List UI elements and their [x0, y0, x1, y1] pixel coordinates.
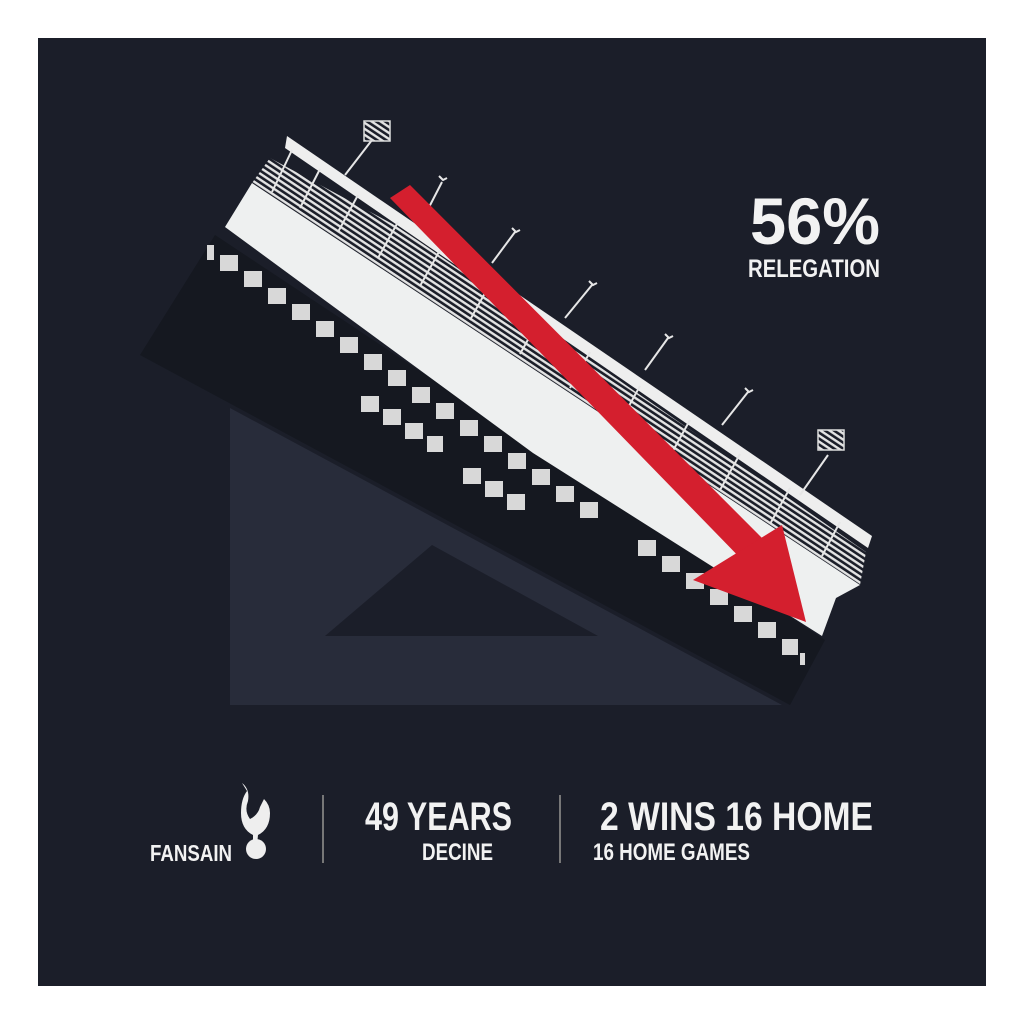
- floodlights and flags: [345, 121, 844, 495]
- white band: [225, 183, 860, 636]
- seat squares row 1: [207, 245, 805, 665]
- divider: [322, 795, 324, 863]
- stat: 56% relegation: RELEGATION: [748, 255, 880, 283]
- seat squares row 2: [361, 396, 525, 510]
- red arrow: [390, 185, 806, 622]
- hatched seating: [252, 158, 866, 585]
- stat: 49 years: 49 YEARS: [365, 795, 512, 839]
- dark slanted stand base: [140, 235, 825, 705]
- stat: 49 years: DECINE: [422, 839, 493, 866]
- brand: FANSAIN with rooster icon: [150, 783, 270, 866]
- roof: [285, 136, 872, 548]
- stat: 49 years: [365, 795, 512, 866]
- icon: rooster on ball: [241, 783, 270, 859]
- stat: 2 wins: 16 HOME GAMES: [593, 839, 750, 866]
- stadium stand: [225, 136, 872, 636]
- brand: FANSAIN with rooster icon: FANSAIN: [150, 840, 232, 866]
- set square triangle: [230, 408, 782, 705]
- stat: 56% relegation: 56%: [750, 184, 880, 258]
- stat: 2 wins: 2 WINS 16 HOME: [600, 795, 873, 839]
- divider: [559, 795, 561, 863]
- stat: 2 wins: [593, 795, 873, 866]
